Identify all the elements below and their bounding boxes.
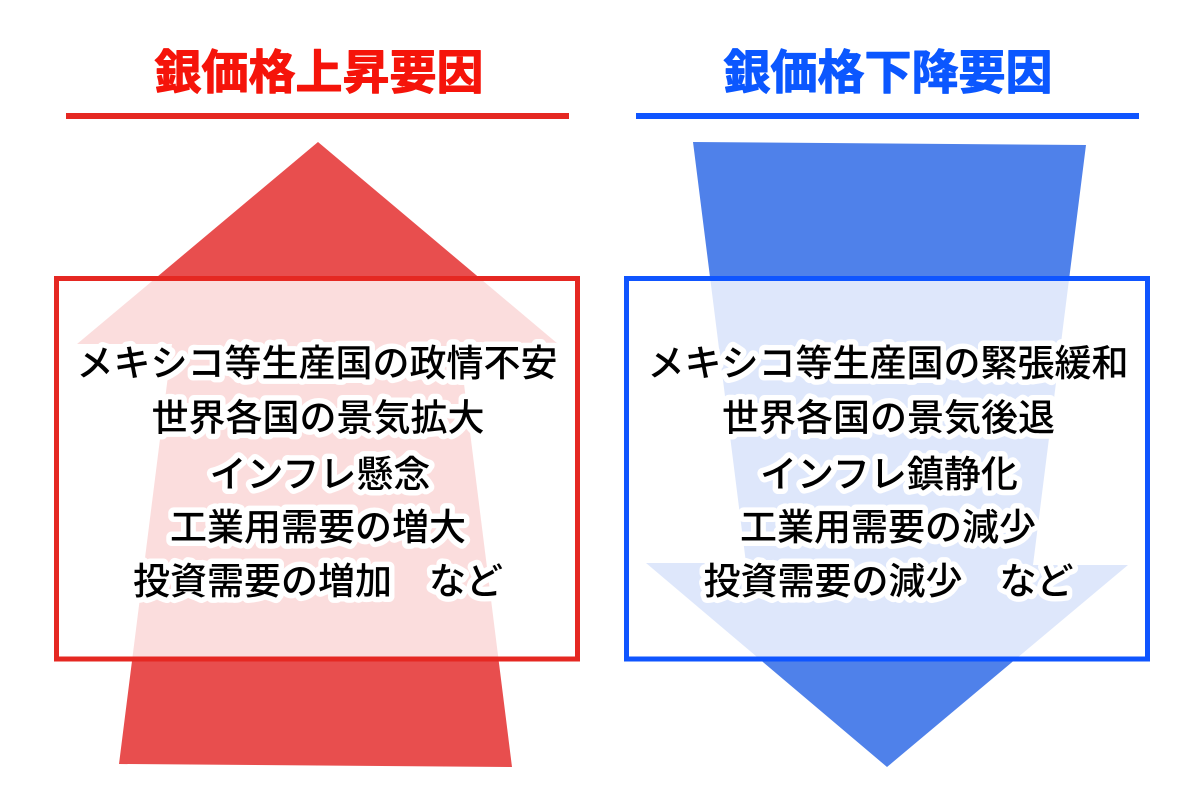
heading: price increase factors: 銀価格上昇要因 <box>154 46 484 99</box>
heading: price decrease factors: 銀価格下降要因 <box>724 46 1052 99</box>
factor: global recession: 世界各国の景気後退 <box>722 398 1055 438</box>
panel: price increase factors <box>56 46 578 767</box>
arrow: up <box>77 142 558 767</box>
arrow: down <box>646 142 1128 767</box>
text box: red frame <box>56 278 578 659</box>
list: increase factors <box>76 343 558 602</box>
factor: global expansion: 世界各国の景気拡大 <box>152 398 484 438</box>
factor: inflation concern: インフレ懸念 <box>210 454 430 495</box>
text box: blue frame <box>626 278 1148 659</box>
factor: industrial demand increase: 工業用需要の増大 <box>170 507 466 548</box>
factor: investment demand decrease: 投資需要の減少 など <box>704 561 1074 602</box>
panel: price decrease factors <box>626 46 1148 767</box>
factor: political instability: メキシコ等生産国の政情不安 <box>76 343 558 384</box>
heading underline: red <box>66 113 569 119</box>
factor: investment demand increase: 投資需要の増加 など <box>133 561 503 602</box>
factor: inflation calming: インフレ鎮静化 <box>760 454 1018 495</box>
factor: industrial demand decrease: 工業用需要の減少 <box>740 507 1036 548</box>
heading underline: blue <box>636 113 1139 119</box>
list: decrease factors <box>648 343 1128 602</box>
factor: political easing: メキシコ等生産国の緊張緩和 <box>648 343 1128 384</box>
